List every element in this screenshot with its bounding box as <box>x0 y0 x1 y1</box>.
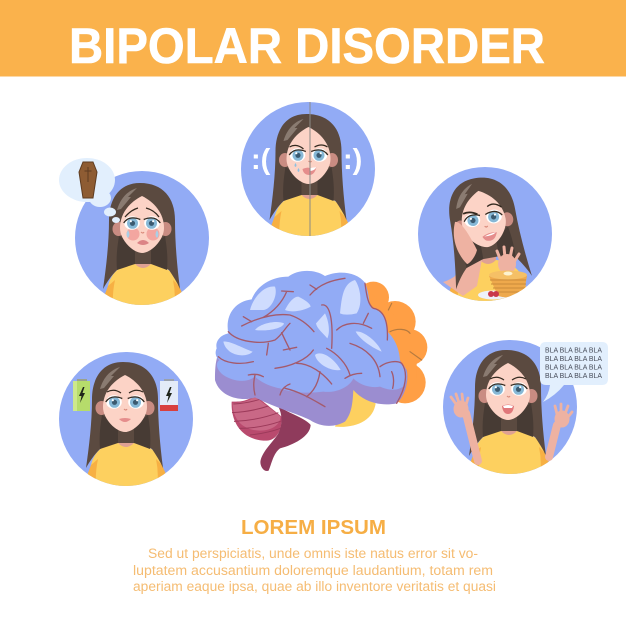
orange lobe veins <box>388 303 422 360</box>
icon: full battery <box>73 379 90 411</box>
speech text: BLA BLA BLA BLA <box>545 346 602 354</box>
panel: top figure half sad half happy <box>241 102 375 246</box>
speech text: BLA BLA BLA BLA <box>545 354 602 363</box>
arm and hand on cheek <box>454 222 477 264</box>
title banner <box>0 0 626 76</box>
cerebrum lower shade <box>215 327 407 426</box>
girl <box>468 350 551 482</box>
plate <box>478 290 508 300</box>
caption heading: LOREM IPSUM <box>241 516 386 539</box>
panel: right figure no appetite <box>418 167 552 311</box>
pancakes <box>489 270 527 297</box>
icon: coffin <box>79 162 97 198</box>
panel: bottom-left figure low and high energy <box>59 352 193 494</box>
girl <box>443 178 532 301</box>
cerebrum <box>216 271 407 393</box>
caption text: Sed ut perspiciatis, unde omnis iste natus error sit vo- <box>148 546 478 561</box>
split line <box>309 102 311 236</box>
panel: bottom-right figure talkative <box>443 340 577 482</box>
frontal lobe orange <box>358 282 427 403</box>
girl <box>270 114 348 236</box>
happy emoticon: :) <box>343 144 362 176</box>
left arm raised <box>451 394 478 461</box>
panel: left figure depressed <box>75 171 209 315</box>
temporal lobe yellow <box>335 388 376 427</box>
brain stem <box>260 407 311 471</box>
cerebellum <box>232 395 282 441</box>
caption text <box>133 546 496 594</box>
title: BIPOLAR DISORDER <box>69 18 545 74</box>
speech bubble <box>540 342 608 402</box>
icon: low battery <box>160 379 178 411</box>
girl <box>103 183 182 305</box>
caption text: aperiam eaque ipsa, quae ab illo inventore veritatis et quasi <box>133 579 496 594</box>
caption text: luptatem accusantium doloremque laudantium, totam rem <box>133 563 493 578</box>
speech text <box>545 346 602 380</box>
sad emoticon: :( <box>251 144 271 176</box>
girl <box>86 362 166 486</box>
right arm raised <box>549 404 572 457</box>
brain illustration <box>215 271 427 471</box>
veins <box>218 278 405 407</box>
highlights <box>223 280 382 370</box>
strawberries <box>488 291 499 297</box>
speech text: BLA BLA BLA BLA <box>545 371 602 380</box>
thought bubble with coffin <box>59 158 120 223</box>
raised hand <box>497 247 519 274</box>
speech text: BLA BLA BLA BLA <box>545 362 602 372</box>
